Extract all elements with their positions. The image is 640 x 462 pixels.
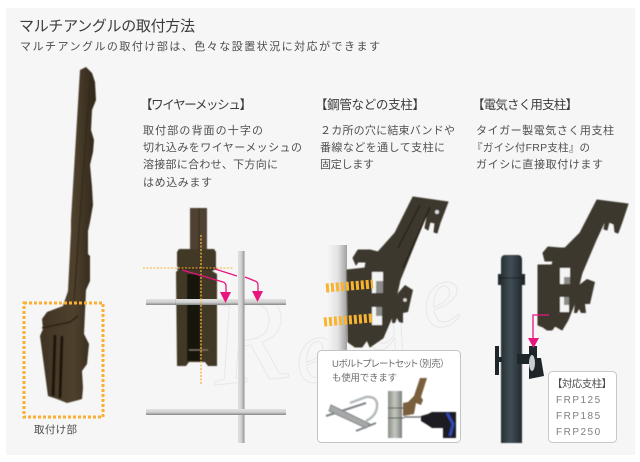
arrow: left slot (182, 270, 231, 303)
callout: compatible posts: FRP185 (556, 411, 602, 422)
column: steel pipe text: 番線などを通して支柱に (320, 140, 445, 154)
bracket on pipe (347, 197, 448, 347)
title: マルチアングルの取付方法 (19, 18, 195, 35)
vertical wire (238, 251, 244, 443)
watermark: e (409, 244, 472, 349)
column: electric fence text: 『ガイシ付FRP支柱』の (472, 141, 590, 154)
right insulator (517, 346, 544, 379)
steel pipe illustration (324, 197, 448, 351)
electric fence post illustration (495, 200, 628, 443)
callout: compatible posts: FRP125 (556, 395, 602, 406)
column: electric fence text: タイガー製電気さく用支柱 (476, 123, 614, 137)
left insulator (495, 346, 502, 375)
column: wire mesh text: はめ込みます (143, 176, 212, 189)
callout: compatible posts (548, 372, 616, 442)
photo: pipe with bracket and drill (388, 378, 456, 438)
callout: compatible posts: 【対応支柱】 (552, 377, 612, 390)
column: wire mesh text: 溶接部に合わせ、下方向に (143, 157, 278, 171)
upper horizontal wire (146, 299, 286, 305)
column: electric fence text: 【電気さく用支柱】 (472, 97, 578, 112)
watermark: R (203, 268, 294, 413)
column: steel pipe text (315, 97, 455, 171)
callout text (332, 358, 445, 384)
arrow: into insulator (528, 315, 549, 348)
pipe (327, 245, 347, 351)
callout text: も使用できます (332, 372, 397, 384)
lower horizontal wire (146, 409, 286, 415)
column: wire mesh text (140, 98, 302, 189)
upper wire over bracket (176, 299, 218, 305)
arrow: right slot (215, 269, 263, 302)
icon: U-bolt (326, 397, 377, 431)
mounting area highlight (24, 303, 103, 417)
watermark: e (284, 299, 343, 405)
column: steel pipe text: 固定します (320, 158, 374, 171)
callout: U-bolt plate set (318, 350, 460, 442)
callout text: Uボルトプレートセット（別売） (332, 358, 445, 370)
column: wire mesh text: 取付部の背面の十字の (143, 123, 263, 137)
column: electric fence text (472, 97, 614, 171)
bracket on mesh (176, 208, 217, 366)
column: steel pipe text: ２カ所の穴に結束バンドや (320, 123, 455, 137)
column: wire mesh text: 切れ込みをワイヤーメッシュの (143, 141, 302, 154)
label: mounting part: 取付け部 (34, 423, 78, 436)
column: steel pipe text: 【鋼管などの支柱】 (315, 97, 425, 112)
watermark (203, 244, 472, 413)
wire mesh illustration (143, 208, 286, 443)
column: wire mesh text: 【ワイヤーメッシュ】 (140, 98, 252, 112)
lower tie band (324, 318, 372, 322)
alignment guides (143, 235, 233, 385)
bracket above post (538, 200, 628, 330)
callout: compatible posts: FRP250 (556, 427, 602, 438)
FRP post (498, 255, 525, 443)
subtitle: マルチアングルの取付け部は、色々な設置状況に対応ができます (20, 39, 380, 53)
upper tie band (326, 284, 373, 288)
photo: full multi-angle bracket (40, 67, 96, 403)
column: electric fence text: ガイシに直接取付けます (476, 158, 603, 171)
watermark: g (349, 264, 417, 371)
